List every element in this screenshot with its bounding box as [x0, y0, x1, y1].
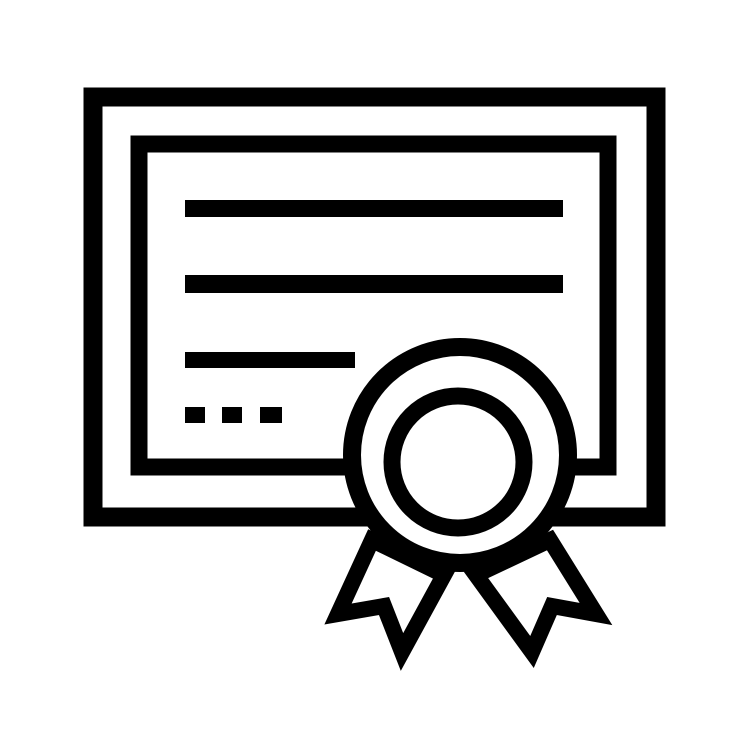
- certificate inner frame: [139, 144, 608, 467]
- text lines: [185, 200, 563, 423]
- certificate outer frame: [93, 97, 656, 517]
- ribbons: [338, 540, 596, 652]
- seal outer ring: [352, 347, 568, 563]
- seal inner ring: [392, 396, 524, 528]
